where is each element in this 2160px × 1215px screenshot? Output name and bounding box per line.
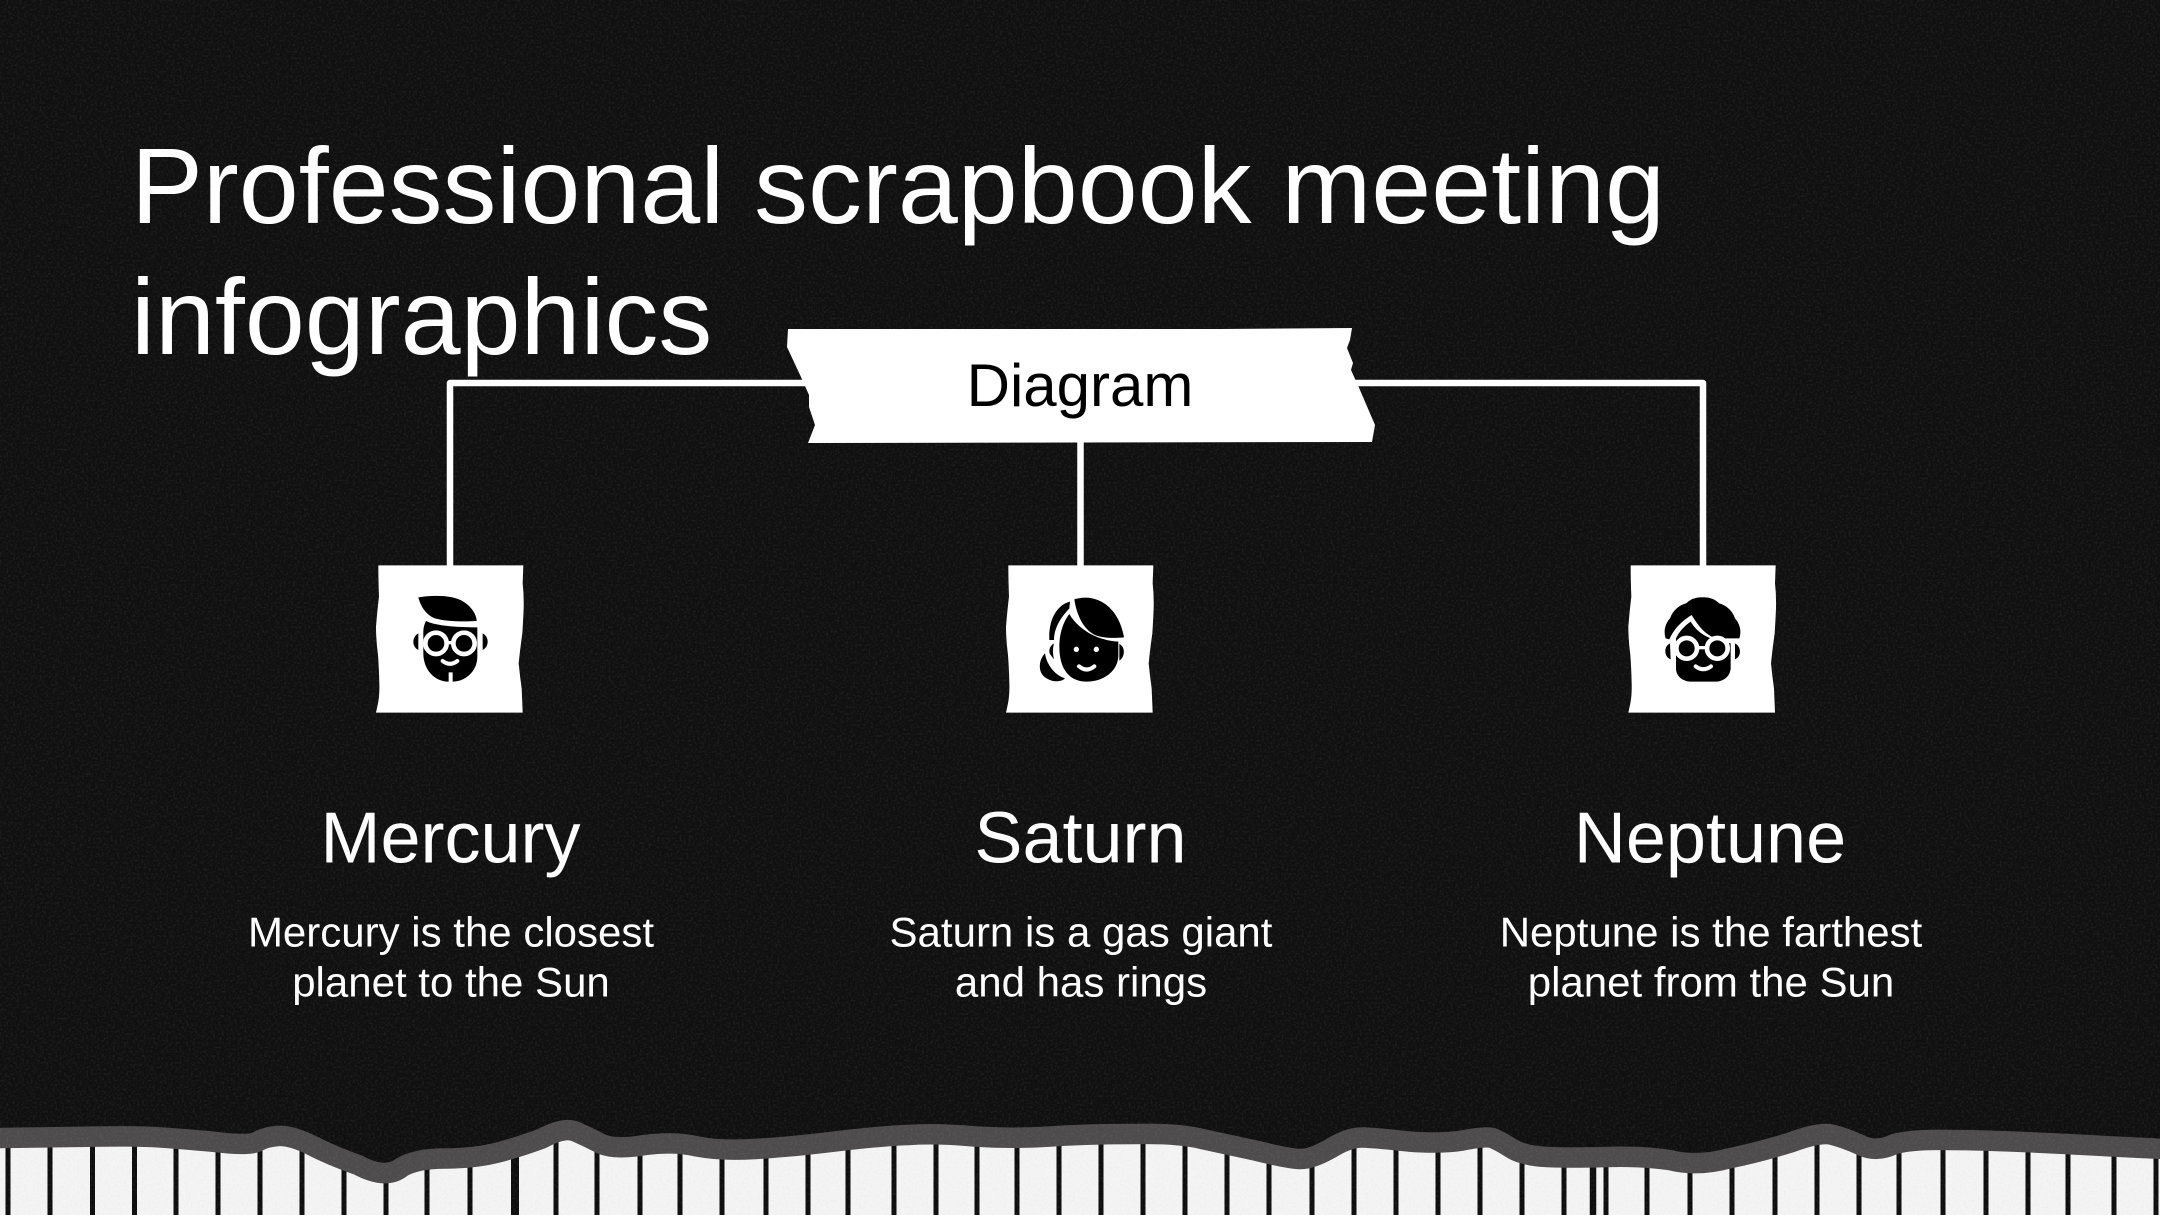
diagram tape label: Diagram (967, 352, 1193, 419)
curly hair face (1665, 597, 1740, 682)
column: Saturn: Saturn (974, 799, 1187, 879)
connector lines (450, 383, 1703, 568)
column: Neptune (1500, 799, 1923, 1006)
man face (413, 596, 488, 682)
column: Mercury: planet to the Sun (292, 959, 610, 1006)
column: Saturn (890, 799, 1273, 1006)
column: Neptune: Neptune (1574, 799, 1846, 879)
icon card: person with curly hair (1628, 565, 1776, 713)
torn paper strip: grey edge (0, 1130, 2160, 1173)
column: Mercury (248, 799, 654, 1006)
column: Saturn: and has rings (955, 959, 1207, 1006)
column: Neptune: Neptune is the farthest (1500, 909, 1923, 956)
column: Mercury: Mercury is the closest (248, 909, 654, 956)
column: Neptune: planet from the Sun (1528, 959, 1894, 1006)
title (131, 125, 1665, 377)
diagram tape label (787, 328, 1375, 443)
woman face (1040, 598, 1124, 682)
icon card: woman (1006, 565, 1154, 713)
column: Mercury: Mercury (320, 799, 581, 879)
title: infographics (131, 256, 712, 377)
torn paper strip: white stripes (0, 1130, 2160, 1215)
column: Saturn: Saturn is a gas giant (890, 909, 1273, 956)
title: Professional scrapbook meeting (131, 125, 1665, 246)
icon card: man with glasses (376, 565, 524, 713)
